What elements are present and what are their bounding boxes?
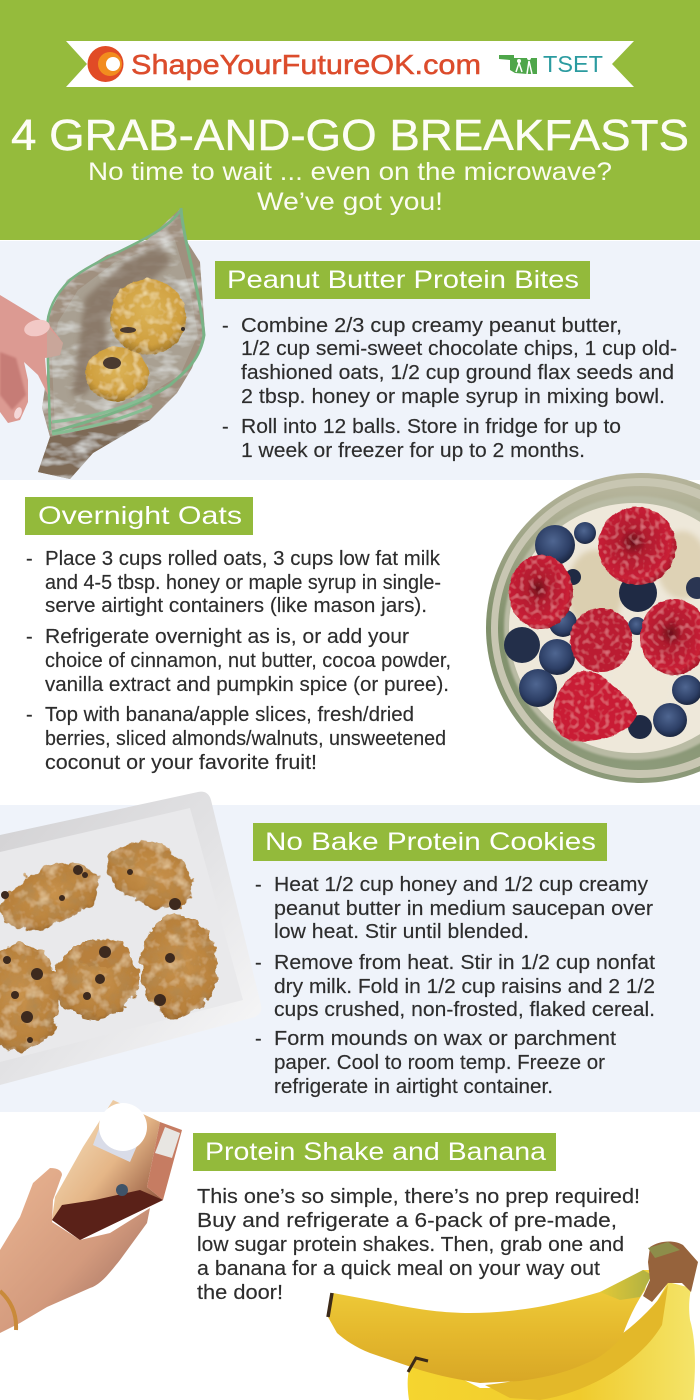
subtitle — [88, 158, 612, 216]
instructions: Remove from heat. Stir in 1/2 cup nonfat — [274, 952, 655, 974]
heading — [215, 261, 590, 299]
instructions: berries, sliced almonds/walnuts, unsweetened — [45, 728, 446, 750]
site name: ShapeYourFutureOK.com — [131, 49, 481, 80]
cookies — [0, 830, 218, 1052]
heading: Peanut Butter Protein Bites — [227, 266, 579, 294]
instructions: Combine 2/3 cup creamy peanut butter, — [241, 315, 622, 337]
heading: Protein Shake and Banana — [205, 1138, 546, 1166]
jar rim — [486, 473, 700, 783]
instructions: Top with banana/apple slices, fresh/dried — [45, 704, 414, 726]
instructions: refrigerate in airtight container. — [274, 1076, 553, 1098]
bracelet — [0, 1291, 16, 1330]
oats — [509, 503, 700, 753]
title: 4 GRAB-AND-GO BREAKFASTS — [11, 111, 689, 160]
instructions: Refrigerate overnight as is, or add your — [45, 626, 409, 648]
instructions: vanilla extract and pumpkin spice (or puree). — [45, 674, 449, 696]
instructions: - — [26, 626, 33, 648]
instructions: dry milk. Fold in 1/2 cup raisins and 2 1/2 — [274, 976, 655, 998]
banana stem crown — [643, 1241, 698, 1302]
instructions: low heat. Stir until blended. — [274, 921, 529, 943]
TSET wordmark: TSET — [543, 51, 603, 77]
back banana — [408, 1282, 695, 1400]
instructions: choice of cinnamon, nut butter, cocoa powder, — [45, 650, 451, 672]
heading — [25, 497, 253, 535]
instructions: Roll into 12 balls. Store in fridge for up to — [241, 416, 621, 438]
banner ribbon — [66, 41, 634, 87]
instructions: Place 3 cups rolled oats, 3 cups low fat milk — [45, 548, 441, 570]
instructions: - — [255, 1028, 262, 1050]
panel: Peanut Butter Protein Bites — [215, 261, 677, 462]
description: This one’s so simple, there’s no prep required! — [197, 1186, 640, 1208]
instructions — [26, 548, 451, 774]
panel: Overnight Oats — [25, 497, 451, 774]
instructions — [255, 874, 655, 1098]
instructions: coconut or your favorite fruit! — [45, 752, 317, 774]
heading — [193, 1133, 556, 1171]
bag — [38, 208, 205, 479]
heading: No Bake Protein Cookies — [265, 828, 596, 856]
instructions: - — [255, 952, 262, 974]
panel: No Bake Protein Cookies — [253, 823, 655, 1098]
carton — [52, 1100, 163, 1240]
photo: no bake cookies on white plate — [0, 792, 261, 1085]
instructions: - — [26, 704, 33, 726]
photo: mason jar of overnight oats with berries — [486, 473, 700, 783]
photo: peanut butter bites in zip bag held by hand — [0, 208, 205, 479]
icon: TSET Oklahoma logo — [499, 55, 537, 74]
hand — [0, 1168, 150, 1333]
banana tips — [328, 1293, 332, 1317]
instructions: - — [26, 548, 33, 570]
photo: hand holding protein shake carton — [0, 1100, 182, 1333]
heading: Overnight Oats — [38, 502, 242, 530]
instructions: cups crushed, non-frosted, flaked cereal. — [274, 999, 655, 1021]
hand gripping bag — [0, 295, 63, 423]
panel: header — [0, 0, 700, 240]
instructions: fashioned oats, 1/2 cup ground flax seeds and — [241, 362, 674, 384]
instructions: 2 tbsp. honey or maple syrup in mixing bowl. — [241, 386, 665, 408]
description: the door! — [197, 1282, 283, 1304]
instructions: and 4-5 tbsp. honey or maple syrup in single- — [45, 572, 441, 594]
panel: Protein Shake and Banana — [193, 1133, 640, 1304]
instructions — [222, 315, 677, 462]
instructions: paper. Cool to room temp. Freeze or — [274, 1052, 605, 1074]
peanut butter balls — [85, 279, 186, 401]
cap — [93, 1112, 146, 1162]
heading — [253, 823, 607, 861]
instructions: Heat 1/2 cup honey and 1/2 cup creamy — [274, 874, 648, 896]
blueberries — [504, 522, 700, 739]
description: Buy and refrigerate a 6-pack of pre-made, — [197, 1210, 617, 1232]
instructions: Form mounds on wax or parchment — [274, 1028, 616, 1050]
instructions: 1 week or freezer for up to 2 months. — [241, 440, 585, 462]
instructions: serve airtight containers (like mason jars). — [45, 595, 427, 617]
description: low sugar protein shakes. Then, grab one and — [197, 1234, 624, 1256]
raspberries — [509, 507, 700, 741]
front banana — [328, 1270, 650, 1383]
instructions: - — [222, 416, 229, 438]
description: a banana for a quick meal on your way out — [197, 1258, 600, 1280]
instructions: 1/2 cup semi-sweet chocolate chips, 1 cup old- — [241, 338, 677, 360]
icon: Shape Your Future logo — [88, 46, 124, 82]
instructions: - — [222, 315, 229, 337]
subtitle: No time to wait ... even on the microwave? — [88, 158, 612, 186]
instructions: - — [255, 874, 262, 896]
plate — [0, 792, 261, 1085]
description — [197, 1186, 640, 1304]
subtitle: We’ve got you! — [257, 188, 443, 216]
photo: bananas — [328, 1241, 698, 1400]
instructions: peanut butter in medium saucepan over — [274, 898, 653, 920]
